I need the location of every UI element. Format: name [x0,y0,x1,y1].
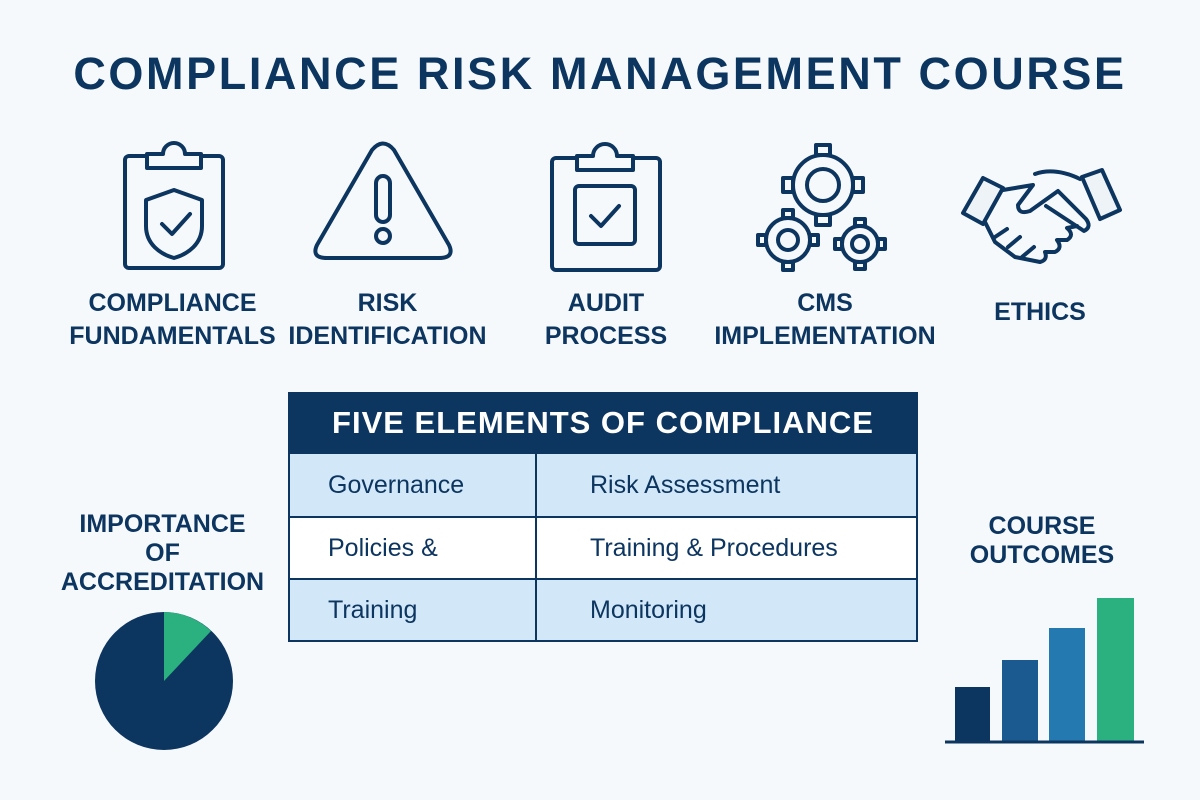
label: risk identification [288,289,487,350]
label: cms implementation: IMPLEMENTATION [714,322,936,350]
label: compliance fundamentals: FUNDAMENTALS [69,322,276,350]
table cells: Policies & [328,534,438,562]
table cells: Risk Assessment [590,471,780,499]
heading: importance of accreditation: IMPORTANCE [79,510,246,538]
table cells: Training [328,596,417,624]
label: risk identification: IDENTIFICATION [288,322,487,350]
label: audit process: AUDIT [568,289,644,317]
table cells: Training & Procedures [590,534,838,562]
bar chart [945,598,1144,744]
table header [288,392,918,454]
table: five elements [288,392,918,642]
heading: course outcomes [970,512,1114,569]
label: audit process [545,289,667,350]
heading: course outcomes: OUTCOMES [970,541,1114,569]
table header: FIVE ELEMENTS OF COMPLIANCE [332,405,874,440]
icon: gears [756,143,887,272]
table cells: Monitoring [590,596,707,624]
label: ethics: ETHICS [994,298,1086,326]
label: audit process: PROCESS [545,322,667,350]
title: COMPLIANCE RISK MANAGEMENT COURSE [73,48,1127,99]
table cells: Governance [328,471,464,499]
table cells [328,471,838,624]
pie chart [95,612,233,750]
label: compliance fundamentals [69,289,276,350]
heading: importance of accreditation [61,510,264,596]
label: cms implementation [714,289,936,350]
label: compliance fundamentals: COMPLIANCE [88,289,257,317]
icon: warning triangle [313,142,453,260]
heading: importance of accreditation: ACCREDITATION [61,568,264,596]
icon: clipboard check [550,142,662,272]
heading: importance of accreditation: OF [145,539,180,567]
label: risk identification: RISK [358,289,417,317]
icon: clipboard shield [123,141,225,270]
label: cms implementation: CMS [797,289,853,317]
icon: handshake [960,168,1122,264]
heading: course outcomes: COURSE [989,512,1095,540]
